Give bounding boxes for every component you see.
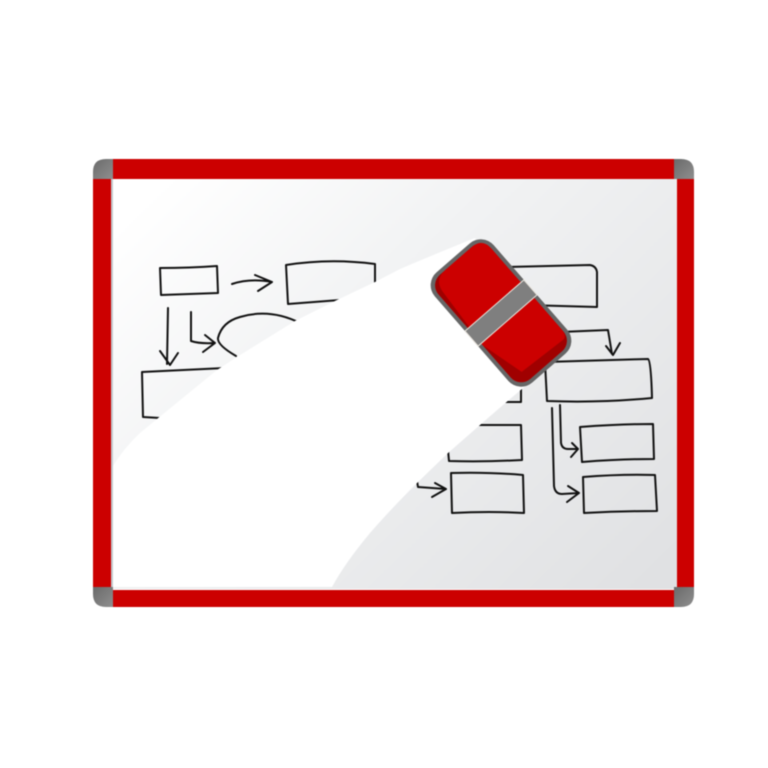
top rail (113, 159, 674, 179)
arrow down (160, 308, 178, 365)
upper right box (505, 265, 597, 307)
left rail (93, 179, 111, 587)
arrow to right box 1 (560, 405, 578, 457)
flowchart box 2 (286, 261, 375, 304)
arrow into bottom middle box (417, 481, 446, 497)
elbow arrow (191, 312, 215, 352)
eraser (424, 232, 578, 394)
flowchart box 1 (160, 266, 218, 295)
right box 2 (583, 475, 657, 513)
inner frame edge (111, 179, 113, 588)
eraser red top (429, 238, 567, 382)
flowchart box 3 (142, 368, 225, 418)
eraser band (465, 280, 537, 346)
lower middle box (448, 425, 522, 461)
right rail (677, 179, 694, 587)
bottom middle box (451, 473, 524, 513)
arrow to right box 2 (552, 408, 579, 502)
hand-drawn flowchart (142, 261, 657, 513)
eraser body (424, 232, 578, 394)
large right box (545, 359, 652, 402)
ellipse (218, 314, 300, 356)
corner bottom left (93, 587, 113, 607)
whiteboard surface (111, 177, 679, 589)
frame (93, 159, 694, 607)
erased white swoosh (113, 238, 545, 587)
connector arrow (560, 330, 620, 355)
partly erased middle box (505, 388, 521, 402)
right box 1 (580, 424, 654, 462)
bottom rail (113, 590, 674, 607)
corner bottom right (674, 587, 694, 607)
corner top right (674, 159, 694, 179)
corner top left (93, 159, 113, 179)
eraser dark red base (429, 238, 573, 388)
arrow right (232, 275, 272, 291)
